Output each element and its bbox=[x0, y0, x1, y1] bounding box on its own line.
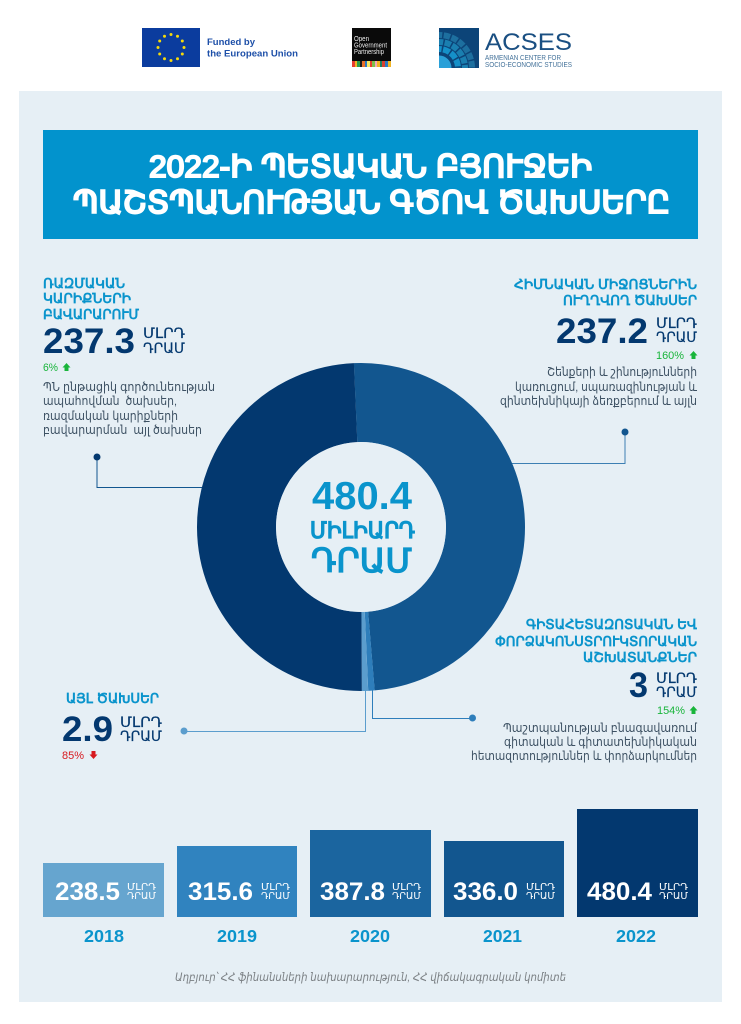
block: main assets: ՀԻՄՆԱԿԱՆ ՄԻՋՈՑՆԵՐԻՆ bbox=[514, 277, 697, 292]
block: research and development bbox=[471, 617, 698, 763]
logo: EU flag with funding text: Funded by bbox=[207, 37, 256, 48]
block: main assets: ՄԼՐԴ bbox=[656, 315, 697, 331]
bar 2019: 315.6 bbox=[188, 878, 253, 906]
block: military needs: ապահովման ծախսեր, bbox=[43, 394, 177, 408]
donut center total: ՄԻԼԻԱՐԴ bbox=[310, 518, 415, 543]
block: military needs: բավարարման այլ ծախսեր bbox=[43, 423, 202, 437]
block: military needs: 237.3 bbox=[43, 322, 135, 361]
bar chart: yearly budget bbox=[43, 809, 698, 946]
bar 2021: ԴՐԱՄ bbox=[526, 891, 555, 902]
donut center total: ԴՐԱՄ bbox=[311, 542, 412, 579]
block: research and development: գիտական և գիտատեխնիկական bbox=[504, 735, 697, 749]
block: military needs: ՊՆ ընթացիկ գործունեության bbox=[43, 380, 215, 394]
logo: Open Government Partnership: Partnership bbox=[354, 47, 384, 56]
bar 2022: 2022 bbox=[616, 926, 656, 946]
block: research and development: ՄԼՐԴ bbox=[656, 670, 697, 686]
bar 2022: ԴՐԱՄ bbox=[659, 891, 688, 902]
block: research and development: ՓՈՐՁԱԿՈՆՍՏՐՈՒԿՏՈՐԱԿԱՆ bbox=[495, 634, 697, 649]
bar 2022 bbox=[577, 809, 698, 946]
block: research and development: ԴՐԱՄ bbox=[656, 684, 697, 700]
block: military needs: ԿԱՐԻՔՆԵՐԻ bbox=[43, 291, 131, 306]
logo: Open Government Partnership bbox=[352, 28, 391, 67]
bar 2020: ՄԼՐԴ bbox=[392, 882, 421, 893]
logo: ACSES: SOCIO-ECONOMIC STUDIES bbox=[485, 60, 572, 69]
bar 2018: ՄԼՐԴ bbox=[127, 882, 156, 893]
leader line: research bbox=[372, 688, 476, 722]
bar 2021: 2021 bbox=[483, 926, 522, 946]
block: military needs: 6% bbox=[43, 362, 58, 374]
bar 2020: ԴՐԱՄ bbox=[392, 891, 421, 902]
bar 2020 bbox=[310, 830, 431, 946]
title banner bbox=[43, 130, 698, 239]
block: other expenses: ԱՅԼ ԾԱԽՍԵՐ bbox=[66, 691, 159, 706]
block: other expenses bbox=[62, 691, 162, 762]
block: main assets: 237.2 bbox=[556, 312, 648, 351]
leader line: military needs bbox=[94, 454, 205, 488]
block: other expenses: 2.9 bbox=[62, 710, 113, 749]
bar 2019: 2019 bbox=[217, 926, 257, 946]
block: research and development: Պաշտպանության բնագավառում bbox=[503, 721, 697, 735]
block: military needs bbox=[43, 276, 215, 437]
block: research and development: հետազոտություններ և փորձարկումներ bbox=[471, 749, 697, 763]
leader line: other expenses bbox=[180, 688, 366, 734]
bar 2022: 480.4 bbox=[587, 878, 652, 906]
block: main assets: 160% bbox=[656, 350, 684, 362]
block: main assets bbox=[500, 277, 698, 408]
bar 2019 bbox=[177, 846, 297, 946]
bar 2018: ԴՐԱՄ bbox=[127, 891, 156, 902]
bar 2019: ԴՐԱՄ bbox=[261, 891, 290, 902]
block: main assets: ԴՐԱՄ bbox=[656, 329, 697, 345]
title banner: 2022-Ի ՊԵՏԱԿԱՆ ԲՅՈՒՋԵԻ bbox=[149, 149, 592, 184]
logo: Open Government Partnership: Government bbox=[354, 40, 388, 50]
bar 2021 bbox=[444, 841, 564, 946]
block: military needs: ԲԱՎԱՐԱՐՈՒՄ bbox=[43, 307, 139, 322]
block: military needs: ԴՐԱՄ bbox=[143, 340, 185, 356]
donut center total bbox=[310, 475, 415, 579]
block: research and development: ԱՇԽԱՏԱՆՔՆԵՐ bbox=[583, 650, 697, 665]
bar 2020: 387.8 bbox=[320, 878, 385, 906]
bar 2021: ՄԼՐԴ bbox=[526, 882, 555, 893]
block: research and development: ԳԻՏԱՀԵՏԱԶՈՏԱԿԱՆ ԵՎ bbox=[526, 617, 697, 632]
block: other expenses: 85% bbox=[62, 750, 84, 762]
bar 2020: 2020 bbox=[350, 926, 390, 946]
leader line: main assets bbox=[510, 428, 628, 464]
logo: ACSES: ACSES bbox=[485, 29, 572, 56]
logo: ACSES bbox=[439, 28, 572, 68]
bar 2018: 238.5 bbox=[55, 878, 120, 906]
bar 2018: 2018 bbox=[84, 926, 124, 946]
bar 2022: ՄԼՐԴ bbox=[659, 882, 688, 893]
bar 2019: ՄԼՐԴ bbox=[261, 882, 290, 893]
logo: ACSES: ARMENIAN CENTER FOR bbox=[485, 53, 561, 62]
title banner: ՊԱՇՏՊԱՆՈՒԹՅԱՆ ԳԾՈՎ ԾԱԽՍԵՐԸ bbox=[73, 185, 670, 220]
logo: EU flag with funding text: the European Union bbox=[207, 48, 298, 60]
block: main assets: զինտեխնիկայի ձեռքբերում և այլն bbox=[500, 394, 697, 408]
block: main assets: կառուցում, սպառազինության և bbox=[515, 380, 697, 394]
block: military needs: ՄԼՐԴ bbox=[143, 325, 185, 341]
block: other expenses: ԴՐԱՄ bbox=[120, 728, 162, 744]
logo: EU flag with funding text bbox=[142, 28, 298, 67]
block: military needs: ՌԱԶՄԱԿԱՆ bbox=[43, 276, 125, 291]
donut center total: 480.4 bbox=[312, 475, 412, 518]
block: other expenses: ՄԼՐԴ bbox=[120, 714, 162, 730]
bar 2021: 336.0 bbox=[453, 878, 518, 906]
block: military needs: ռազմական կարիքների bbox=[43, 409, 178, 423]
block: research and development: 3 bbox=[629, 666, 648, 705]
bar 2018 bbox=[43, 863, 164, 946]
block: research and development: 154% bbox=[657, 705, 685, 717]
logo: Open Government Partnership: Open bbox=[354, 34, 369, 43]
block: main assets: ՈՒՂՂՎՈՂ ԾԱԽՍԵՐ bbox=[563, 293, 697, 308]
block: main assets: Շենքերի և շինությունների bbox=[547, 365, 697, 379]
source note: Աղբյուր՝ ՀՀ ֆինանսների նախարարություն, ՀՀ վիճակագրական կոմիտե bbox=[175, 970, 566, 984]
donut chart bbox=[227, 393, 495, 661]
